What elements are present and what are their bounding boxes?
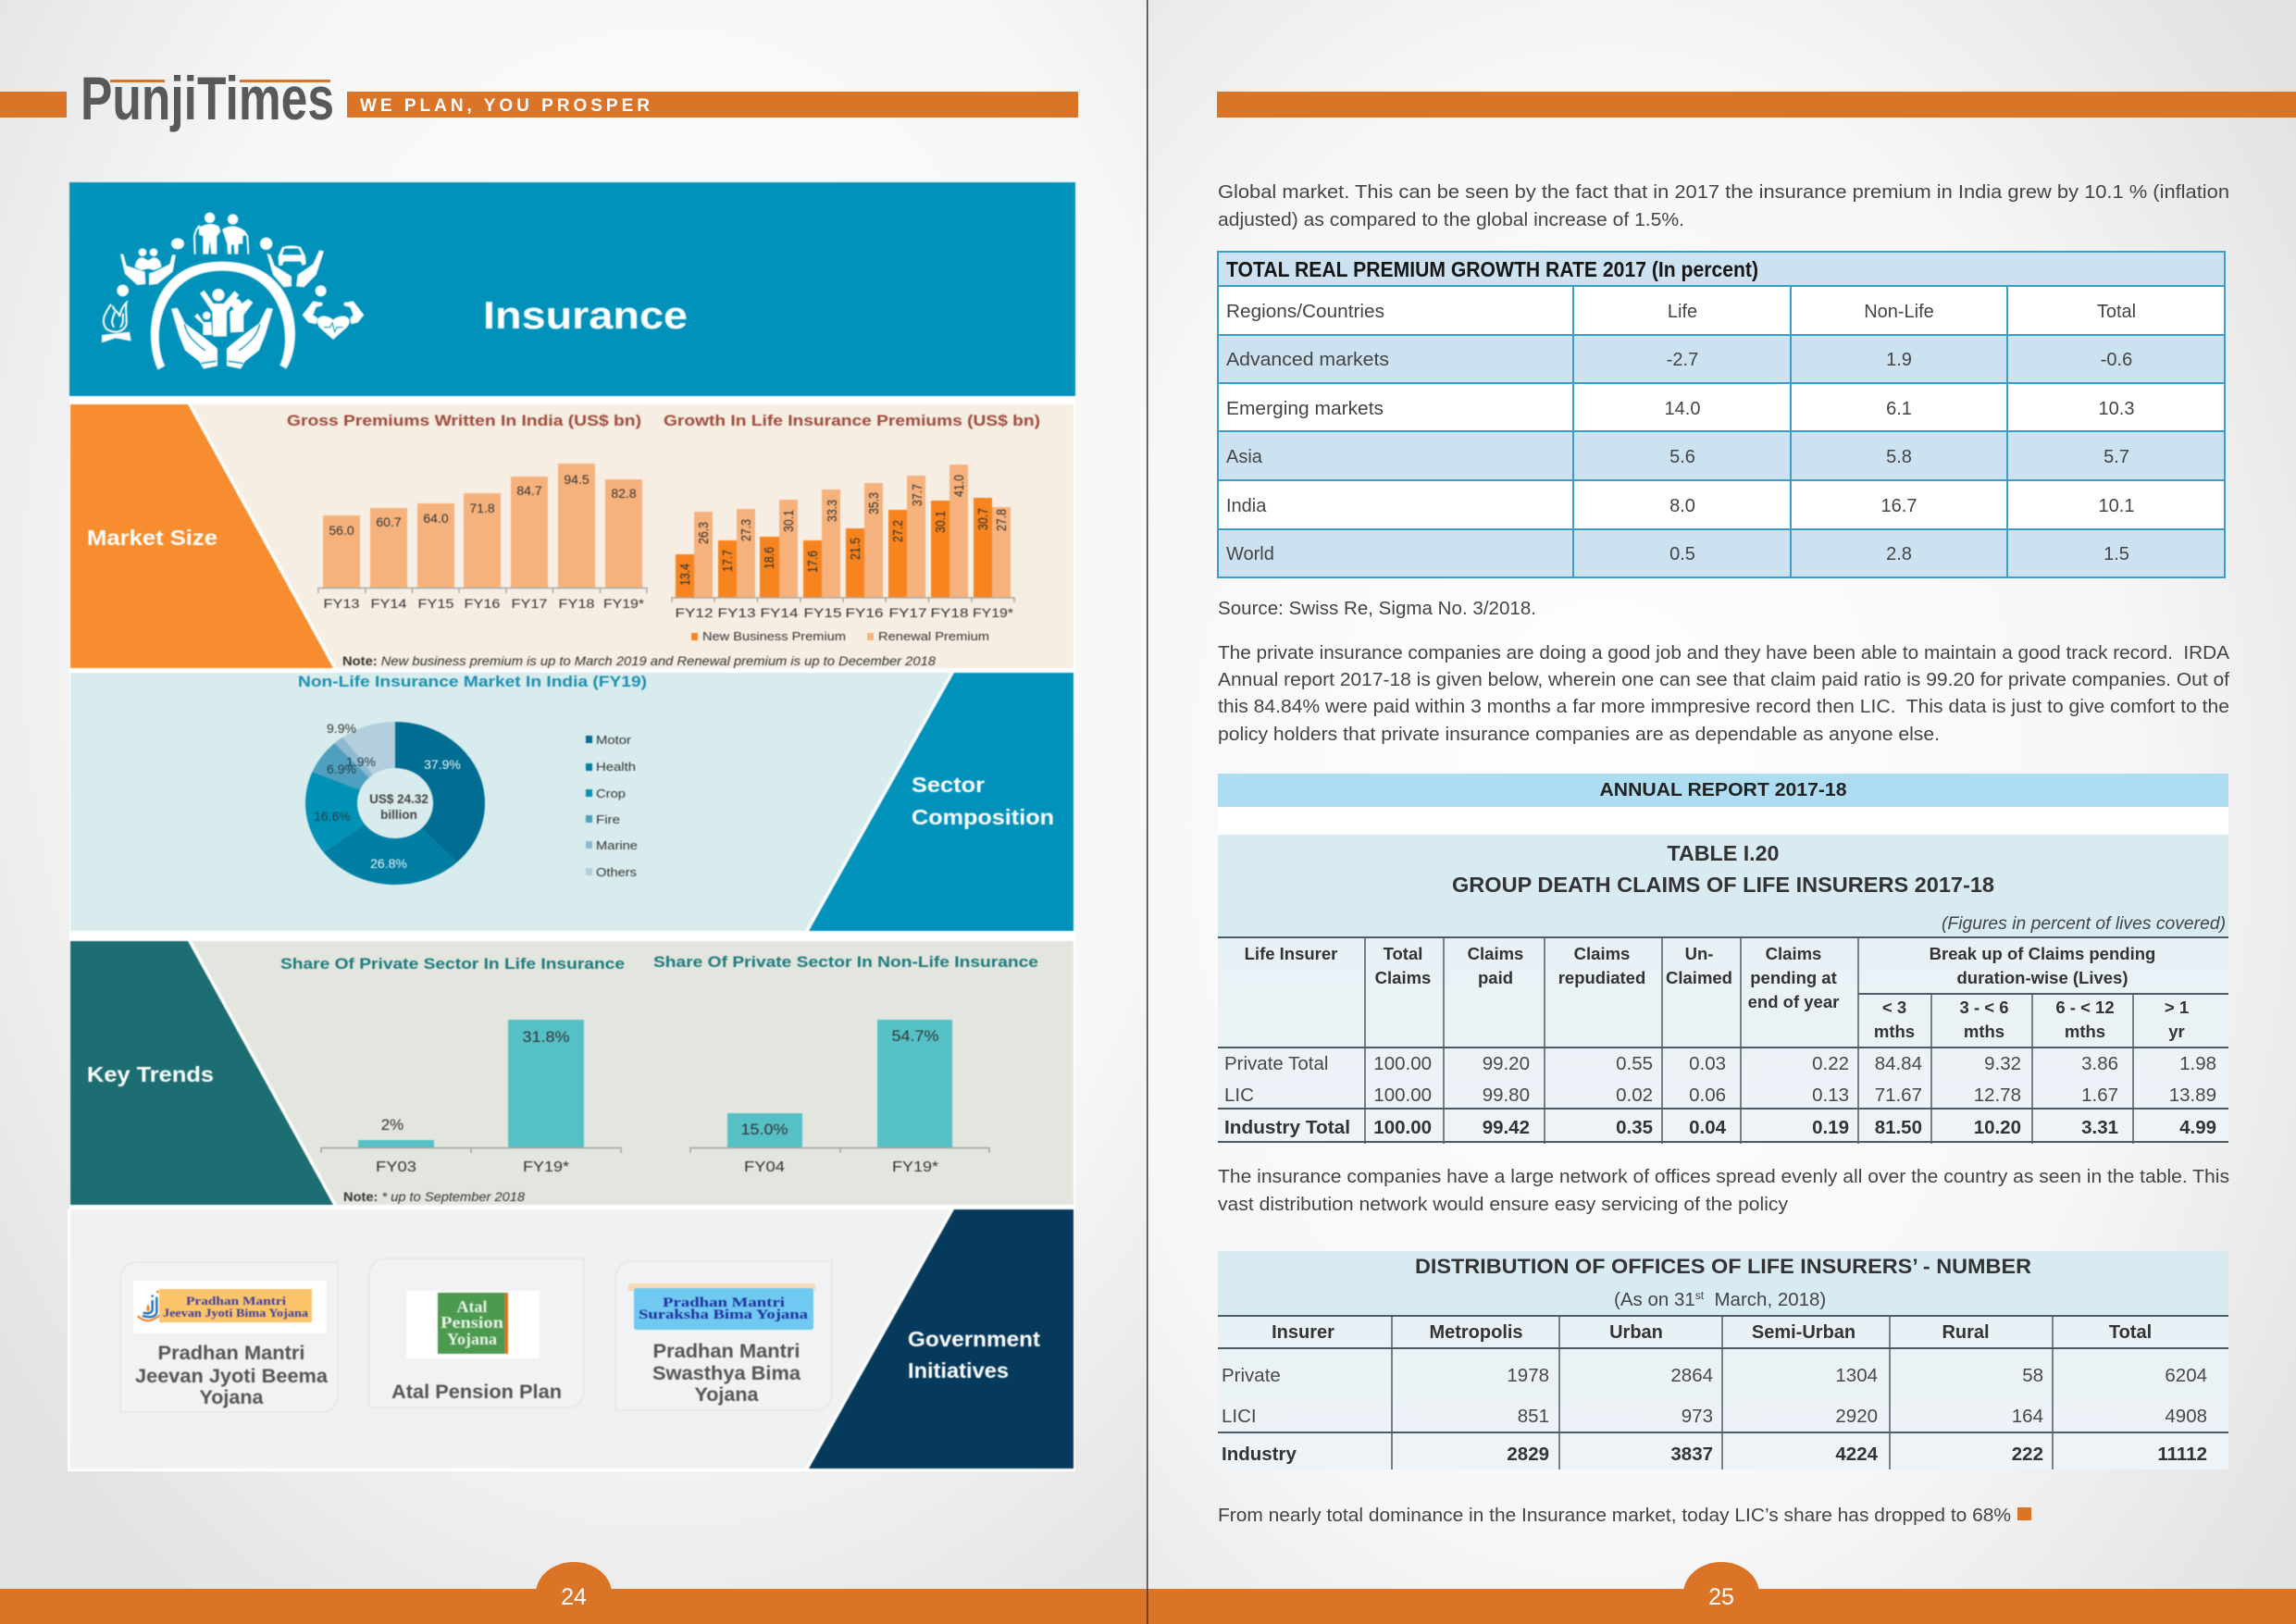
tagline: WE PLAN, YOU PROSPER bbox=[360, 96, 650, 116]
text block: private insurers paragraph: The private insurance companies are doing a good job and they have been able to maintain a good track record. IRDA bbox=[1218, 643, 2230, 663]
donut chart: non-life composition bbox=[305, 721, 485, 885]
card: Atal Pension Plan bbox=[369, 1258, 584, 1407]
table: group death claims: 12.78 bbox=[1974, 1085, 2021, 1106]
bar chart: private share non-life: FY04 bbox=[744, 1159, 785, 1175]
table: group death claims: 71.67 bbox=[1875, 1085, 1922, 1106]
table: group death claims: TABLE I.20 bbox=[1668, 841, 1779, 865]
table: total real premium growth rate: 1.5 bbox=[2104, 544, 2129, 564]
table: group death claims: 3 - < 6 bbox=[1960, 998, 2008, 1017]
card: Pradhan Mantri Jeevan Jyoti Beema Yojana: Pradhan Mantri bbox=[157, 1343, 305, 1364]
table: group death claims: Claims bbox=[1375, 968, 1431, 987]
table: group death claims: 0.35 bbox=[1616, 1117, 1653, 1138]
bar chart: life insurance premiums: 27.3 bbox=[738, 519, 754, 541]
legend: non-life segments: Marine bbox=[596, 838, 638, 852]
table: distribution of offices: Semi-Urban bbox=[1752, 1322, 1855, 1343]
bar chart: life insurance premiums: FY14 bbox=[761, 605, 799, 620]
text block: private insurers paragraph bbox=[1218, 643, 2230, 745]
table: distribution of offices: Rural bbox=[1942, 1322, 1990, 1343]
panel: Market Size bbox=[70, 404, 1074, 668]
bar chart: life insurance premiums: 37.7 bbox=[910, 484, 925, 506]
footer: right page with page number: 25 bbox=[1708, 1584, 1734, 1610]
table: group death claims: 99.80 bbox=[1483, 1085, 1530, 1106]
bar chart: gross premiums: 82.8 bbox=[611, 486, 637, 501]
bar chart: private share non-life: 54.7% bbox=[892, 1027, 938, 1045]
section tab: Key Trends: Key Trends bbox=[87, 1062, 214, 1086]
bar chart: life insurance premiums: 30.7 bbox=[975, 508, 991, 530]
table: distribution of offices: 4908 bbox=[2165, 1406, 2207, 1427]
bar chart: life insurance premiums: 35.3 bbox=[866, 492, 882, 514]
table: total real premium growth rate: Non-Life bbox=[1864, 302, 1934, 322]
bar chart: life insurance premiums: 27.8 bbox=[994, 509, 1010, 531]
legend: non-life segments bbox=[586, 733, 638, 879]
table: group death claims: pending at bbox=[1750, 968, 1837, 987]
bar chart: gross premiums: FY13 bbox=[324, 596, 360, 611]
chart title: Growth in Life Premiums: Growth In Life Insurance Premiums (US$ bn) bbox=[664, 412, 1040, 429]
table: distribution of offices: 973 bbox=[1682, 1406, 1713, 1427]
table: distribution of offices: March, 2018) bbox=[1704, 1289, 1826, 1310]
table: group death claims: repudiated bbox=[1558, 968, 1645, 987]
table: group death claims: 100.00 bbox=[1373, 1085, 1432, 1106]
table: total real premium growth rate: Advanced markets bbox=[1226, 350, 1389, 370]
bar chart: life insurance premiums: 33.3 bbox=[825, 500, 840, 522]
bar chart: private share non-life bbox=[690, 1020, 989, 1175]
table: distribution of offices: 6204 bbox=[2165, 1365, 2207, 1386]
table: group death claims: (Figures in percent of lives covered) bbox=[1942, 914, 2226, 934]
icon: j logo mark bbox=[138, 1291, 159, 1320]
section tab: Government Initiatives bbox=[809, 1209, 1074, 1469]
bar chart: life insurance premiums: 26.3 bbox=[696, 522, 712, 544]
table: group death claims: 13.89 bbox=[2169, 1085, 2216, 1106]
bar chart: gross premiums: FY17 bbox=[511, 596, 548, 611]
table: group death claims: 100.00 bbox=[1373, 1053, 1432, 1074]
section tab: Market Size bbox=[70, 404, 333, 668]
table: group death claims: yr bbox=[2168, 1022, 2185, 1041]
table: total real premium growth rate: Total bbox=[2097, 302, 2136, 322]
table: distribution of offices: DISTRIBUTION OF OFFICES OF LIFE INSURERS’ - NUMBER bbox=[1415, 1255, 2031, 1278]
text block: office network paragraph bbox=[1218, 1167, 2229, 1215]
table: group death claims: Claims bbox=[1766, 944, 1821, 963]
title: Insurance: Insurance bbox=[483, 293, 688, 337]
table: distribution of offices: (As on 31 bbox=[1614, 1289, 1695, 1310]
section tab: Sector Composition bbox=[809, 673, 1074, 931]
table: group death claims: 0.13 bbox=[1812, 1085, 1849, 1106]
icon: insurance protection hands and family bbox=[102, 213, 364, 370]
legend: premium types bbox=[691, 629, 989, 643]
table: total real premium growth rate: 8.0 bbox=[1669, 496, 1695, 516]
table: group death claims: 100.00 bbox=[1373, 1117, 1432, 1138]
panel: Insurance title banner bbox=[69, 182, 1075, 396]
bar chart: life insurance premiums: 41.0 bbox=[951, 475, 967, 497]
text block: private insurers paragraph: policy holders that private insurance companies are as dependable as anyone else. bbox=[1218, 725, 1940, 745]
table: distribution of offices: 4224 bbox=[1835, 1444, 1879, 1465]
bar chart: private share non-life: FY19* bbox=[892, 1159, 938, 1175]
bar chart: gross premiums: 94.5 bbox=[564, 472, 590, 487]
chart title: private share life: Share Of Private Sector In Life Insurance bbox=[280, 956, 625, 973]
bar chart: gross premiums: 64.0 bbox=[423, 511, 449, 526]
card: Pradhan Mantri Swasthya Bima Yojana: Pradhan Mantri bbox=[663, 1295, 785, 1310]
bar chart: gross premiums: FY16 bbox=[465, 596, 501, 611]
table: total real premium growth rate: 6.1 bbox=[1886, 399, 1912, 419]
bar chart: life insurance premiums bbox=[672, 465, 1014, 620]
card: Pradhan Mantri Jeevan Jyoti Beema Yojana: Yojana bbox=[200, 1387, 264, 1408]
card: Pradhan Mantri Swasthya Bima Yojana: Yojana bbox=[694, 1384, 759, 1406]
legend: non-life segments: Health bbox=[596, 760, 636, 774]
text block: intro paragraph bbox=[1218, 182, 2229, 230]
table: total real premium growth rate: 0.5 bbox=[1669, 544, 1695, 564]
table: total real premium growth rate: 10.1 bbox=[2099, 496, 2134, 516]
donut chart: non-life composition: 26.8% bbox=[370, 856, 407, 871]
card: Pradhan Mantri Swasthya Bima Yojana: Suraksha Bima Yojana bbox=[639, 1308, 809, 1322]
bar chart: life insurance premiums: FY12 bbox=[676, 605, 714, 620]
table: group death claims: Claimed bbox=[1666, 968, 1732, 987]
table: total real premium growth rate: Regions/Countries bbox=[1226, 302, 1384, 322]
text block: private insurers paragraph: this 84.84% were paid within 3 months a far more immpresive record then LIC. This data is just to give comfort to the bbox=[1218, 697, 2229, 717]
table: group death claims: Private Total bbox=[1224, 1053, 1328, 1074]
panel: Key Trends bbox=[70, 941, 1074, 1205]
donut chart: non-life composition: 9.9% bbox=[327, 721, 356, 736]
table: group death claims: < 3 bbox=[1882, 998, 1906, 1017]
table: total real premium growth rate: India bbox=[1226, 496, 1267, 516]
legend: non-life segments: Fire bbox=[596, 812, 620, 826]
table: group death claims: 9.32 bbox=[1984, 1053, 2021, 1074]
section tab: Government Initiatives: Government bbox=[908, 1327, 1040, 1351]
table: distribution of offices: 1978 bbox=[1507, 1365, 1549, 1386]
white backing behind left panel stack bbox=[68, 182, 1075, 1471]
legend: premium types: Renewal Premium bbox=[878, 629, 989, 643]
table: group death claims: 6 - < 12 bbox=[2055, 998, 2115, 1017]
table: distribution of offices: Urban bbox=[1609, 1322, 1663, 1343]
table: group death claims: mths bbox=[1964, 1022, 2004, 1041]
text block: intro paragraph: adjusted) as compared to the global increase of 1.5%. bbox=[1218, 210, 1684, 230]
table: group death claims: GROUP DEATH CLAIMS OF LIFE INSURERS 2017-18 bbox=[1452, 873, 1994, 897]
chart title: Gross Premiums: Gross Premiums Written In India (US$ bn) bbox=[287, 412, 641, 429]
table: group death claims: 1.67 bbox=[2081, 1085, 2118, 1106]
table: distribution of offices: 851 bbox=[1518, 1406, 1549, 1427]
donut chart: non-life composition: US$ 24.32 bbox=[369, 792, 428, 806]
table: distribution of offices bbox=[1218, 1251, 2228, 1469]
text block: office network paragraph: The insurance companies have a large network of offices spread evenly all over the country as seen in the table. This bbox=[1218, 1167, 2229, 1187]
source note: Source: Swiss Re, Sigma No. 3/2018. bbox=[1218, 599, 1536, 619]
banner: annual report: ANNUAL REPORT 2017-18 bbox=[1599, 780, 1847, 800]
bar chart: private share life: FY03 bbox=[376, 1159, 416, 1175]
bar chart: gross premiums: FY14 bbox=[370, 596, 407, 611]
table: total real premium growth rate: Asia bbox=[1226, 447, 1263, 467]
table: total real premium growth rate: 5.7 bbox=[2104, 447, 2129, 467]
table: group death claims: 0.06 bbox=[1689, 1085, 1726, 1106]
panel: Sector Composition bbox=[70, 673, 1074, 931]
text block: private insurers paragraph: Annual report 2017-18 is given below, wherein one can see that claim paid ratio is 99.20 for private companies. Out of bbox=[1218, 670, 2229, 690]
table: distribution of offices: Insurer bbox=[1272, 1322, 1334, 1343]
legend: premium types: New Business Premium bbox=[702, 629, 846, 643]
table: group death claims: 3.86 bbox=[2081, 1053, 2118, 1074]
table: distribution of offices: Private bbox=[1222, 1365, 1281, 1386]
table: group death claims: 4.99 bbox=[2179, 1117, 2216, 1138]
table: group death claims: Claims bbox=[1574, 944, 1630, 963]
section tab: Government Initiatives: Initiatives bbox=[908, 1358, 1009, 1382]
table: total real premium growth rate bbox=[1218, 252, 2225, 577]
table: group death claims: 1.98 bbox=[2179, 1053, 2216, 1074]
table: distribution of offices: Metropolis bbox=[1429, 1322, 1523, 1343]
table: group death claims: Total bbox=[1384, 944, 1422, 963]
note: market size: Note: New business premium is up to March 2019 and Renewal premium is up to December 2018 bbox=[342, 653, 936, 668]
table: group death claims: LIC bbox=[1224, 1085, 1254, 1106]
bar chart: life insurance premiums: 30.1 bbox=[933, 511, 949, 533]
table: group death claims: mths bbox=[2065, 1022, 2105, 1041]
donut chart: non-life composition: 1.9% bbox=[346, 754, 376, 769]
footer: left page with page number: 24 bbox=[561, 1584, 587, 1610]
table: distribution of offices: 11112 bbox=[2157, 1444, 2207, 1465]
page spine divider bbox=[1147, 0, 1148, 1624]
bar chart: private share life: FY19* bbox=[523, 1159, 569, 1175]
legend: non-life segments: Motor bbox=[596, 733, 632, 747]
table: total real premium growth rate: 2.8 bbox=[1886, 544, 1912, 564]
bar chart: gross premiums: FY15 bbox=[418, 596, 454, 611]
bar chart: life insurance premiums: 30.1 bbox=[781, 510, 797, 532]
header: right page bar bbox=[1217, 92, 2296, 118]
bar chart: gross premiums: 84.7 bbox=[516, 483, 542, 498]
bar chart: gross premiums bbox=[318, 464, 647, 611]
table: total real premium growth rate: World bbox=[1226, 544, 1274, 564]
table: total real premium growth rate: 5.6 bbox=[1669, 447, 1695, 467]
bar chart: life insurance premiums: 18.6 bbox=[762, 547, 777, 569]
table: distribution of offices: 3837 bbox=[1670, 1444, 1713, 1465]
bar chart: life insurance premiums: FY19* bbox=[973, 605, 1014, 620]
card: Atal Pension Plan: Atal bbox=[457, 1297, 487, 1316]
table: distribution of offices: 58 bbox=[2022, 1365, 2043, 1386]
card: Pradhan Mantri Swasthya Bima Yojana: Swasthya Bima bbox=[652, 1363, 800, 1384]
table: distribution of offices: Total bbox=[2109, 1322, 2152, 1343]
table: distribution of offices: 222 bbox=[2012, 1444, 2043, 1465]
legend: non-life segments: Crop bbox=[596, 787, 626, 800]
table: group death claims: duration-wise (Lives) bbox=[1956, 968, 2128, 987]
table: group death claims: 3.31 bbox=[2081, 1117, 2118, 1138]
donut chart: non-life composition: 37.9% bbox=[424, 757, 461, 772]
bar chart: life insurance premiums: 17.7 bbox=[720, 550, 736, 572]
bar chart: private share life: 31.8% bbox=[522, 1028, 570, 1046]
bar chart: life insurance premiums: 27.2 bbox=[890, 520, 906, 542]
bar chart: life insurance premiums: FY15 bbox=[803, 605, 842, 620]
table: group death claims: 81.50 bbox=[1875, 1117, 1922, 1138]
bar chart: gross premiums: FY18 bbox=[559, 596, 595, 611]
table: total real premium growth rate: 14.0 bbox=[1665, 399, 1700, 419]
table: total real premium growth rate: -2.7 bbox=[1667, 350, 1698, 370]
card: Pradhan Mantri Swasthya Bima Yojana bbox=[615, 1261, 832, 1410]
table: distribution of offices: 2920 bbox=[1835, 1406, 1878, 1427]
table: group death claims: end of year bbox=[1748, 992, 1839, 1011]
footer: left page with page number bbox=[0, 1562, 1148, 1624]
table: total real premium growth rate: 5.8 bbox=[1886, 447, 1912, 467]
panel: Government Initiatives bbox=[70, 1209, 1074, 1469]
bar chart: private share non-life: 15.0% bbox=[740, 1121, 788, 1138]
table: group death claims: 99.42 bbox=[1483, 1117, 1530, 1138]
table: group death claims: 0.22 bbox=[1812, 1053, 1849, 1074]
section tab: Sector Composition: Composition bbox=[912, 805, 1054, 829]
table: group death claims: 10.20 bbox=[1974, 1117, 2021, 1138]
card: Pradhan Mantri Jeevan Jyoti Beema Yojana: Pradhan Mantri bbox=[186, 1294, 286, 1308]
card: Pradhan Mantri Jeevan Jyoti Beema Yojana: Jeevan Jyoti Beema bbox=[135, 1366, 328, 1387]
footer: right page with page number bbox=[1148, 1562, 2296, 1624]
card: Atal Pension Plan: Yojana bbox=[447, 1330, 497, 1348]
section tab: Sector Composition: Sector bbox=[912, 773, 985, 797]
bar chart: private share life: 2% bbox=[381, 1116, 403, 1134]
chart title: Non-Life market: Non-Life Insurance Market In India (FY19) bbox=[298, 673, 647, 690]
bar chart: life insurance premiums: FY13 bbox=[718, 605, 756, 620]
table: total real premium growth rate: 1.9 bbox=[1886, 350, 1912, 370]
closing sentence with end mark: From nearly total dominance in the Insurance market, today LIC’s share has dropped to 68% bbox=[1218, 1506, 2011, 1526]
table: distribution of offices: Industry bbox=[1222, 1444, 1297, 1465]
bar chart: life insurance premiums: FY16 bbox=[846, 605, 884, 620]
table: group death claims: > 1 bbox=[2165, 998, 2189, 1017]
bar chart: gross premiums: 71.8 bbox=[469, 501, 495, 515]
section tab: Market Size: Market Size bbox=[87, 526, 217, 550]
table: distribution of offices: st bbox=[1695, 1289, 1705, 1302]
bar chart: life insurance premiums: FY17 bbox=[888, 605, 927, 620]
card: Atal Pension Plan: Atal Pension Plan bbox=[391, 1382, 562, 1403]
legend: non-life segments: Others bbox=[596, 865, 638, 879]
table: distribution of offices: 164 bbox=[2012, 1406, 2043, 1427]
bar chart: life insurance premiums: 17.6 bbox=[805, 551, 821, 573]
donut chart: non-life composition: 6.9% bbox=[327, 762, 356, 776]
table: total real premium growth rate: 16.7 bbox=[1881, 496, 1917, 516]
bar chart: gross premiums: 60.7 bbox=[376, 514, 402, 529]
card: Atal Pension Plan: Pension bbox=[441, 1313, 503, 1332]
table: group death claims: 0.04 bbox=[1689, 1117, 1727, 1138]
table: group death claims: 84.84 bbox=[1875, 1053, 1922, 1074]
table: group death claims: 0.03 bbox=[1689, 1053, 1726, 1074]
table: total real premium growth rate: 10.3 bbox=[2099, 399, 2134, 419]
header: left page masthead bbox=[0, 64, 1078, 132]
table: group death claims: 0.55 bbox=[1616, 1053, 1653, 1074]
bar chart: gross premiums: FY19* bbox=[603, 596, 645, 611]
chart title: private share non-life: Share Of Private Sector In Non-Life Insurance bbox=[653, 954, 1038, 971]
bar chart: gross premiums: 56.0 bbox=[329, 523, 354, 538]
card: Pradhan Mantri Jeevan Jyoti Beema Yojana: Jeevan Jyoti Bima Yojana bbox=[163, 1306, 309, 1320]
table: group death claims: 0.19 bbox=[1812, 1117, 1849, 1138]
table: group death claims: Industry Total bbox=[1224, 1117, 1350, 1138]
table: group death claims: Un- bbox=[1685, 944, 1713, 963]
table: total real premium growth rate: Life bbox=[1668, 302, 1697, 322]
table: distribution of offices: LICI bbox=[1222, 1406, 1257, 1427]
table: group death claims: paid bbox=[1478, 968, 1513, 987]
table: total real premium growth rate: -0.6 bbox=[2101, 350, 2132, 370]
table: distribution of offices: 2864 bbox=[1670, 1365, 1713, 1386]
table: distribution of offices: 2829 bbox=[1507, 1444, 1549, 1465]
donut chart: non-life composition: 16.6% bbox=[314, 809, 351, 824]
card: Pradhan Mantri Swasthya Bima Yojana: Pradhan Mantri bbox=[653, 1341, 800, 1362]
table: group death claims: Claims bbox=[1468, 944, 1523, 963]
bar chart: private share life bbox=[321, 1020, 621, 1175]
bar chart: life insurance premiums: 21.5 bbox=[848, 538, 863, 560]
note: key trends: Note: * up to September 2018 bbox=[343, 1189, 525, 1204]
table: group death claims: mths bbox=[1874, 1022, 1915, 1041]
table: group death claims: 0.02 bbox=[1616, 1085, 1653, 1106]
banner: annual report bbox=[1218, 774, 2228, 835]
card: Pradhan Mantri Jeevan Jyoti Beema Yojana bbox=[120, 1262, 338, 1412]
text block: intro paragraph: Global market. This can be seen by the fact that in 2017 the insurance premium in India grew by 10.1 % (inflation bbox=[1218, 182, 2229, 203]
logo: PunjiTimes: PunjiTimes bbox=[81, 64, 334, 132]
table: group death claims bbox=[1218, 835, 2228, 1144]
donut chart: non-life composition: billion bbox=[380, 808, 417, 822]
table: group death claims: Life Insurer bbox=[1245, 944, 1337, 963]
table: group death claims: Break up of Claims pending bbox=[1930, 944, 2155, 963]
bar chart: life insurance premiums: FY18 bbox=[931, 605, 969, 620]
table: total real premium growth rate: Emerging markets bbox=[1226, 399, 1384, 419]
table: total real premium growth rate: TOTAL REAL PREMIUM GROWTH RATE 2017 (In percent) bbox=[1226, 257, 1758, 281]
bar chart: life insurance premiums: 13.4 bbox=[677, 564, 693, 586]
table: group death claims: 99.20 bbox=[1483, 1053, 1530, 1074]
table: distribution of offices: 1304 bbox=[1835, 1365, 1878, 1386]
section tab: Key Trends bbox=[70, 941, 333, 1205]
text block: office network paragraph: vast distribution network would ensure easy servicing of the policy bbox=[1218, 1195, 1788, 1215]
